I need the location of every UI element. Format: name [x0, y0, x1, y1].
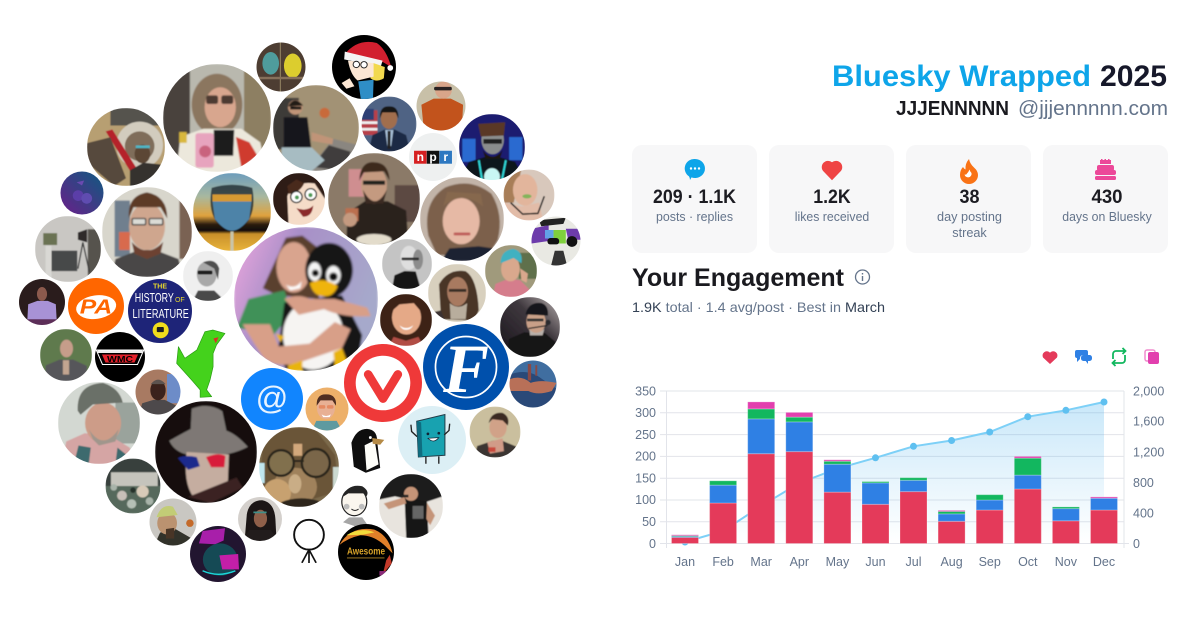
left axis labels: 200	[635, 450, 656, 464]
bar: Mar	[748, 402, 775, 544]
logo: Awesome badge	[338, 524, 394, 580]
bar: Jun	[862, 482, 889, 544]
logo: Awesome badge: Awesome	[347, 546, 385, 557]
month labels: Feb	[712, 555, 734, 569]
logo: WMC wrestling badge	[95, 332, 145, 382]
month labels: Jan	[675, 555, 695, 569]
panel: title header	[832, 60, 1168, 120]
label: day posting streak: streak	[952, 225, 987, 240]
left axis labels: 50	[642, 515, 656, 529]
chart grid and axes	[660, 391, 1129, 548]
logo: The History of Literature: LITERATURE	[132, 306, 189, 321]
logo: PA orange: PA	[80, 296, 112, 318]
logo: The History of Literature: HISTORY	[135, 290, 174, 305]
label: day posting streak: day posting	[937, 209, 1002, 224]
avatar: workshop with gadget	[35, 216, 101, 282]
avatar: man seated on checkered floor	[273, 85, 359, 171]
avatar: comic kid with Santa hat	[332, 35, 396, 99]
month labels: Apr	[790, 555, 809, 569]
logo: NPR: n	[417, 150, 424, 164]
right axis labels: 1,200	[1133, 446, 1164, 460]
avatar: cartoon woman with green glasses	[273, 173, 325, 225]
avatar: bald man in denim jacket	[40, 329, 92, 381]
icon: birthday cake	[1095, 159, 1116, 180]
chart: monthly engagement stacked bars with cumulative line	[635, 384, 1164, 569]
icon: flame	[960, 159, 978, 184]
label: day posting streak	[937, 209, 1002, 240]
month labels: Sep	[979, 555, 1001, 569]
avatar: man in orange shirt	[416, 82, 466, 130]
year: 2025	[1100, 60, 1167, 93]
icon: reposts	[1112, 348, 1126, 366]
month labels: Oct	[1018, 555, 1038, 569]
summary text: 1.9K total · 1.4 avg/post · Best in March	[632, 299, 885, 315]
right axis labels: 800	[1133, 476, 1154, 490]
avatar: monochrome bald man	[382, 239, 432, 289]
avatar: headdress portrait	[87, 108, 165, 186]
month labels: Jun	[865, 555, 886, 569]
left axis labels: 0	[649, 537, 656, 551]
left axis labels	[635, 384, 656, 551]
month labels: Jul	[906, 555, 921, 569]
avatar: bandaged man with 3D glasses and hat	[155, 401, 257, 503]
month labels: Mar	[750, 555, 772, 569]
logo: Vivaldi	[344, 344, 422, 422]
avatar: man in flat cap	[58, 382, 140, 464]
label: days on Bluesky: days on Bluesky	[1062, 209, 1152, 224]
label: posts and replies: posts · replies	[656, 209, 733, 224]
avatar: budgerigars	[256, 42, 306, 92]
avatar: sketch man smiling	[341, 486, 368, 526]
handle: @jjjennnnn.com	[1018, 98, 1168, 120]
logo: at-sign bubble	[241, 368, 303, 430]
value: streak: 38	[960, 187, 980, 208]
avatar: man in lilac t-shirt	[19, 279, 65, 325]
month labels: May	[826, 555, 850, 569]
bar: Jan	[672, 535, 698, 544]
value: likes: 1.2K	[813, 187, 851, 208]
logo: at-sign bubble: @	[256, 380, 288, 416]
icon: quotes	[1145, 350, 1159, 364]
avatar: stick figure head	[285, 516, 333, 564]
bar: May	[824, 460, 851, 544]
left axis labels: 100	[635, 493, 656, 507]
bar: Nov	[1052, 507, 1079, 544]
panel: stat likes received	[769, 145, 894, 253]
logo: NPR: r	[443, 150, 448, 164]
avatar: man in suit with US flag	[362, 96, 416, 152]
avatar: pop art sunglasses face	[532, 216, 580, 266]
bar: Apr	[786, 412, 813, 544]
bar: Oct	[1014, 456, 1041, 544]
avatar: illustrated man with glasses	[306, 388, 348, 430]
icon: likes	[1043, 351, 1057, 364]
bar: Jul	[900, 478, 927, 544]
avatar: purple cherries icon	[60, 172, 104, 214]
avatar: singer in black shirt	[379, 474, 443, 538]
avatar: man with cap and headset	[500, 297, 560, 357]
left axis labels: 300	[635, 406, 656, 420]
avatar: group among flowers	[106, 458, 160, 514]
logo: The History of Literature: THE	[153, 284, 167, 291]
logo: Fraktur F emblem: F	[442, 331, 489, 407]
avatar: man in front of building	[136, 370, 180, 414]
heading: Your Engagement: Your Engagement	[632, 264, 845, 292]
right axis labels: 0	[1133, 537, 1140, 551]
icon: info	[856, 270, 870, 284]
logo: NPR: p	[429, 150, 437, 164]
logo: Fraktur F emblem	[423, 324, 509, 410]
panel: stat posting streak	[906, 145, 1031, 253]
icon: heart	[822, 161, 842, 180]
month labels: Dec	[1093, 555, 1115, 569]
avatar: green T-rex	[177, 330, 225, 397]
avatar: man filming selfie	[470, 406, 520, 458]
avatar: pixel penguin	[351, 428, 384, 473]
avatar: man with green cap	[150, 498, 196, 546]
avatar: monochrome man in sunglasses	[183, 251, 233, 301]
display name: JJJENNNNN	[896, 98, 1009, 120]
cumulative area	[685, 402, 1104, 544]
logo: The History of Literature: OF	[175, 297, 185, 304]
logo: NPR	[409, 133, 457, 181]
avatar: plush with novelty glasses	[259, 427, 339, 507]
avatar: woman with green lipstick	[504, 170, 554, 220]
month labels: Aug	[940, 555, 963, 569]
cumulative line	[682, 398, 1108, 546]
avatar: man with teal hair	[485, 245, 537, 297]
logo: PA orange	[68, 278, 124, 334]
left axis labels: 250	[635, 428, 656, 442]
avatar: man with browline glasses	[102, 187, 192, 277]
avatar: nebula	[510, 360, 556, 408]
logo: The History of Literature	[128, 279, 192, 343]
stacked bars	[672, 402, 1118, 544]
avatar: smiling woman	[380, 294, 432, 346]
icon: replies	[1075, 350, 1092, 364]
value: posts and replies: 209 · 1.1K	[653, 187, 736, 208]
label: likes received: likes received	[795, 209, 869, 224]
title: Bluesky Wrapped	[832, 60, 1091, 93]
avatar: neon cyber portrait	[459, 114, 525, 185]
right axis labels: 2,000	[1133, 384, 1164, 398]
chart legend	[1043, 348, 1159, 366]
bar: Sep	[976, 495, 1003, 544]
bar: Feb	[710, 481, 737, 544]
avatar: bearded man with drink	[328, 153, 420, 245]
bar: Dec	[1090, 497, 1118, 544]
right axis labels	[1133, 384, 1164, 551]
avatar: woman with glasses and pink phone	[163, 64, 271, 172]
avatar: neon helmet	[190, 526, 246, 582]
panel: stat days on Bluesky	[1043, 145, 1168, 253]
icon: speech bubble	[685, 159, 705, 180]
value: days: 430	[1092, 187, 1122, 208]
panel: avatar bubble cluster	[19, 35, 580, 582]
avatar: dark-haired illustrated man	[238, 497, 282, 541]
avatar: happy book mascot	[398, 406, 466, 474]
logo: WMC wrestling badge: WMC	[107, 354, 133, 364]
bar: Aug	[938, 510, 965, 544]
month labels: Nov	[1055, 555, 1078, 569]
left axis labels: 150	[635, 472, 656, 486]
avatar: wine glass at sunset	[193, 173, 271, 251]
panel: stat posts and replies	[632, 145, 757, 253]
avatar: curly-haired woman	[420, 177, 504, 261]
right axis labels: 400	[1133, 506, 1154, 520]
right axis labels: 1,600	[1133, 414, 1164, 428]
month labels	[675, 555, 1115, 569]
avatar: long-haired man with grey beard	[428, 264, 486, 322]
left axis labels: 350	[635, 384, 656, 398]
avatar: woman hugging Tux penguin plush	[234, 227, 378, 371]
